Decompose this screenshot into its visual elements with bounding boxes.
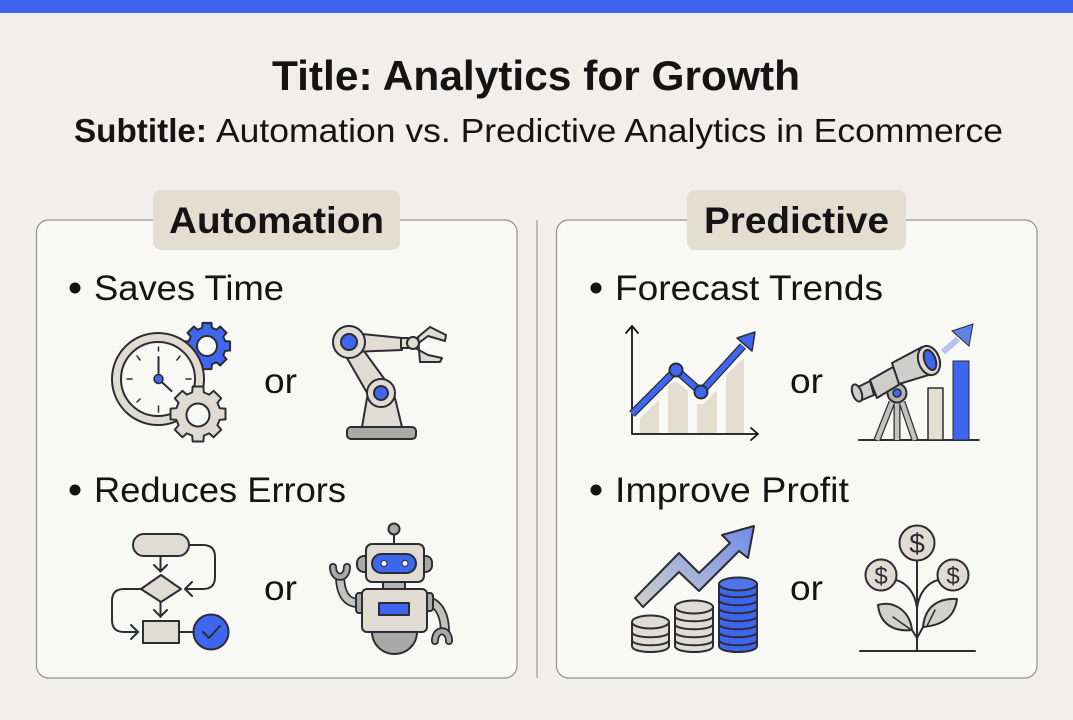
label: or: or <box>264 362 297 401</box>
label: or: or <box>790 569 823 608</box>
panel: predictive <box>556 190 1037 678</box>
label: or: or <box>790 362 823 401</box>
icon: money plant: $ <box>909 528 925 559</box>
icon: robot arm <box>333 326 446 439</box>
bullet: saves time: Saves Time <box>94 269 284 308</box>
icon: clock with gears <box>112 323 230 441</box>
icon: line chart <box>626 326 758 440</box>
panel: automation <box>36 190 517 678</box>
bullet: reduces errors: Reduces Errors <box>94 471 346 510</box>
icon: money plant: $ <box>874 563 888 590</box>
icon: money plant: $ <box>946 563 960 590</box>
icon: flowchart <box>112 534 228 650</box>
icon: robot <box>333 524 449 654</box>
top accent bar <box>0 0 1073 13</box>
bullet: improve profit: Improve Profit <box>615 471 849 510</box>
heading: predictive <box>687 190 906 250</box>
bullet: forecast trends: Forecast Trends <box>615 269 883 308</box>
heading: predictive: Predictive <box>704 200 889 241</box>
subtitle: Automation vs. Predictive Analytics in Ecommerce <box>216 112 1003 149</box>
title: Title: Analytics for Growth <box>272 52 800 99</box>
icon: telescope with bars <box>850 324 979 440</box>
label: or: or <box>264 569 297 608</box>
icon: profit arrow and coin stacks <box>632 526 757 652</box>
subtitle: Subtitle: <box>74 112 207 149</box>
heading: automation: Automation <box>169 200 384 241</box>
icon: money plant <box>860 526 975 651</box>
heading: automation <box>153 190 400 250</box>
